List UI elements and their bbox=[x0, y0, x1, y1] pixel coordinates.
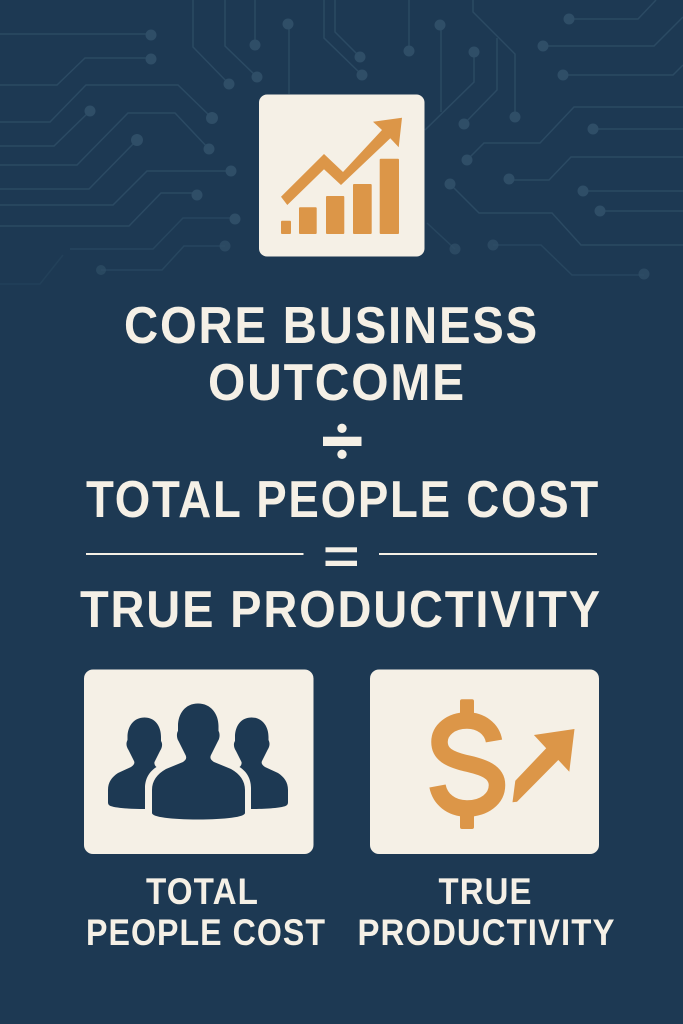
icon: up arrow bbox=[512, 729, 574, 802]
panel: true productivity icon bbox=[370, 670, 599, 854]
label: total people cost: PEOPLE COST bbox=[86, 912, 326, 953]
label: true productivity: TRUE bbox=[438, 871, 532, 912]
panel: total people cost icon bbox=[84, 670, 314, 854]
circuit pattern: traces and nodes bbox=[0, 0, 683, 284]
label: total people cost bbox=[86, 871, 326, 953]
icon: division sign bbox=[323, 424, 362, 459]
icon: rising arrow bbox=[281, 118, 402, 205]
icon: left person bbox=[108, 718, 162, 809]
heading: core business outcome: OUTCOME bbox=[208, 354, 466, 412]
icon: right person bbox=[234, 718, 288, 809]
heading: core business outcome: CORE BUSINESS bbox=[124, 297, 539, 355]
label: true productivity bbox=[358, 871, 616, 953]
heading: core business outcome bbox=[124, 297, 539, 412]
heading: true productivity: TRUE PRODUCTIVITY bbox=[80, 581, 602, 639]
label: true productivity: PRODUCTIVITY bbox=[358, 912, 616, 953]
icon: dollar sign bbox=[438, 699, 497, 829]
bar chart bbox=[281, 159, 399, 234]
equals divider bbox=[86, 547, 597, 566]
icon card: growth chart bbox=[259, 94, 424, 256]
heading: total people cost: TOTAL PEOPLE COST bbox=[86, 471, 600, 529]
label: total people cost: TOTAL bbox=[146, 871, 259, 912]
icon: centre person bbox=[152, 704, 245, 820]
